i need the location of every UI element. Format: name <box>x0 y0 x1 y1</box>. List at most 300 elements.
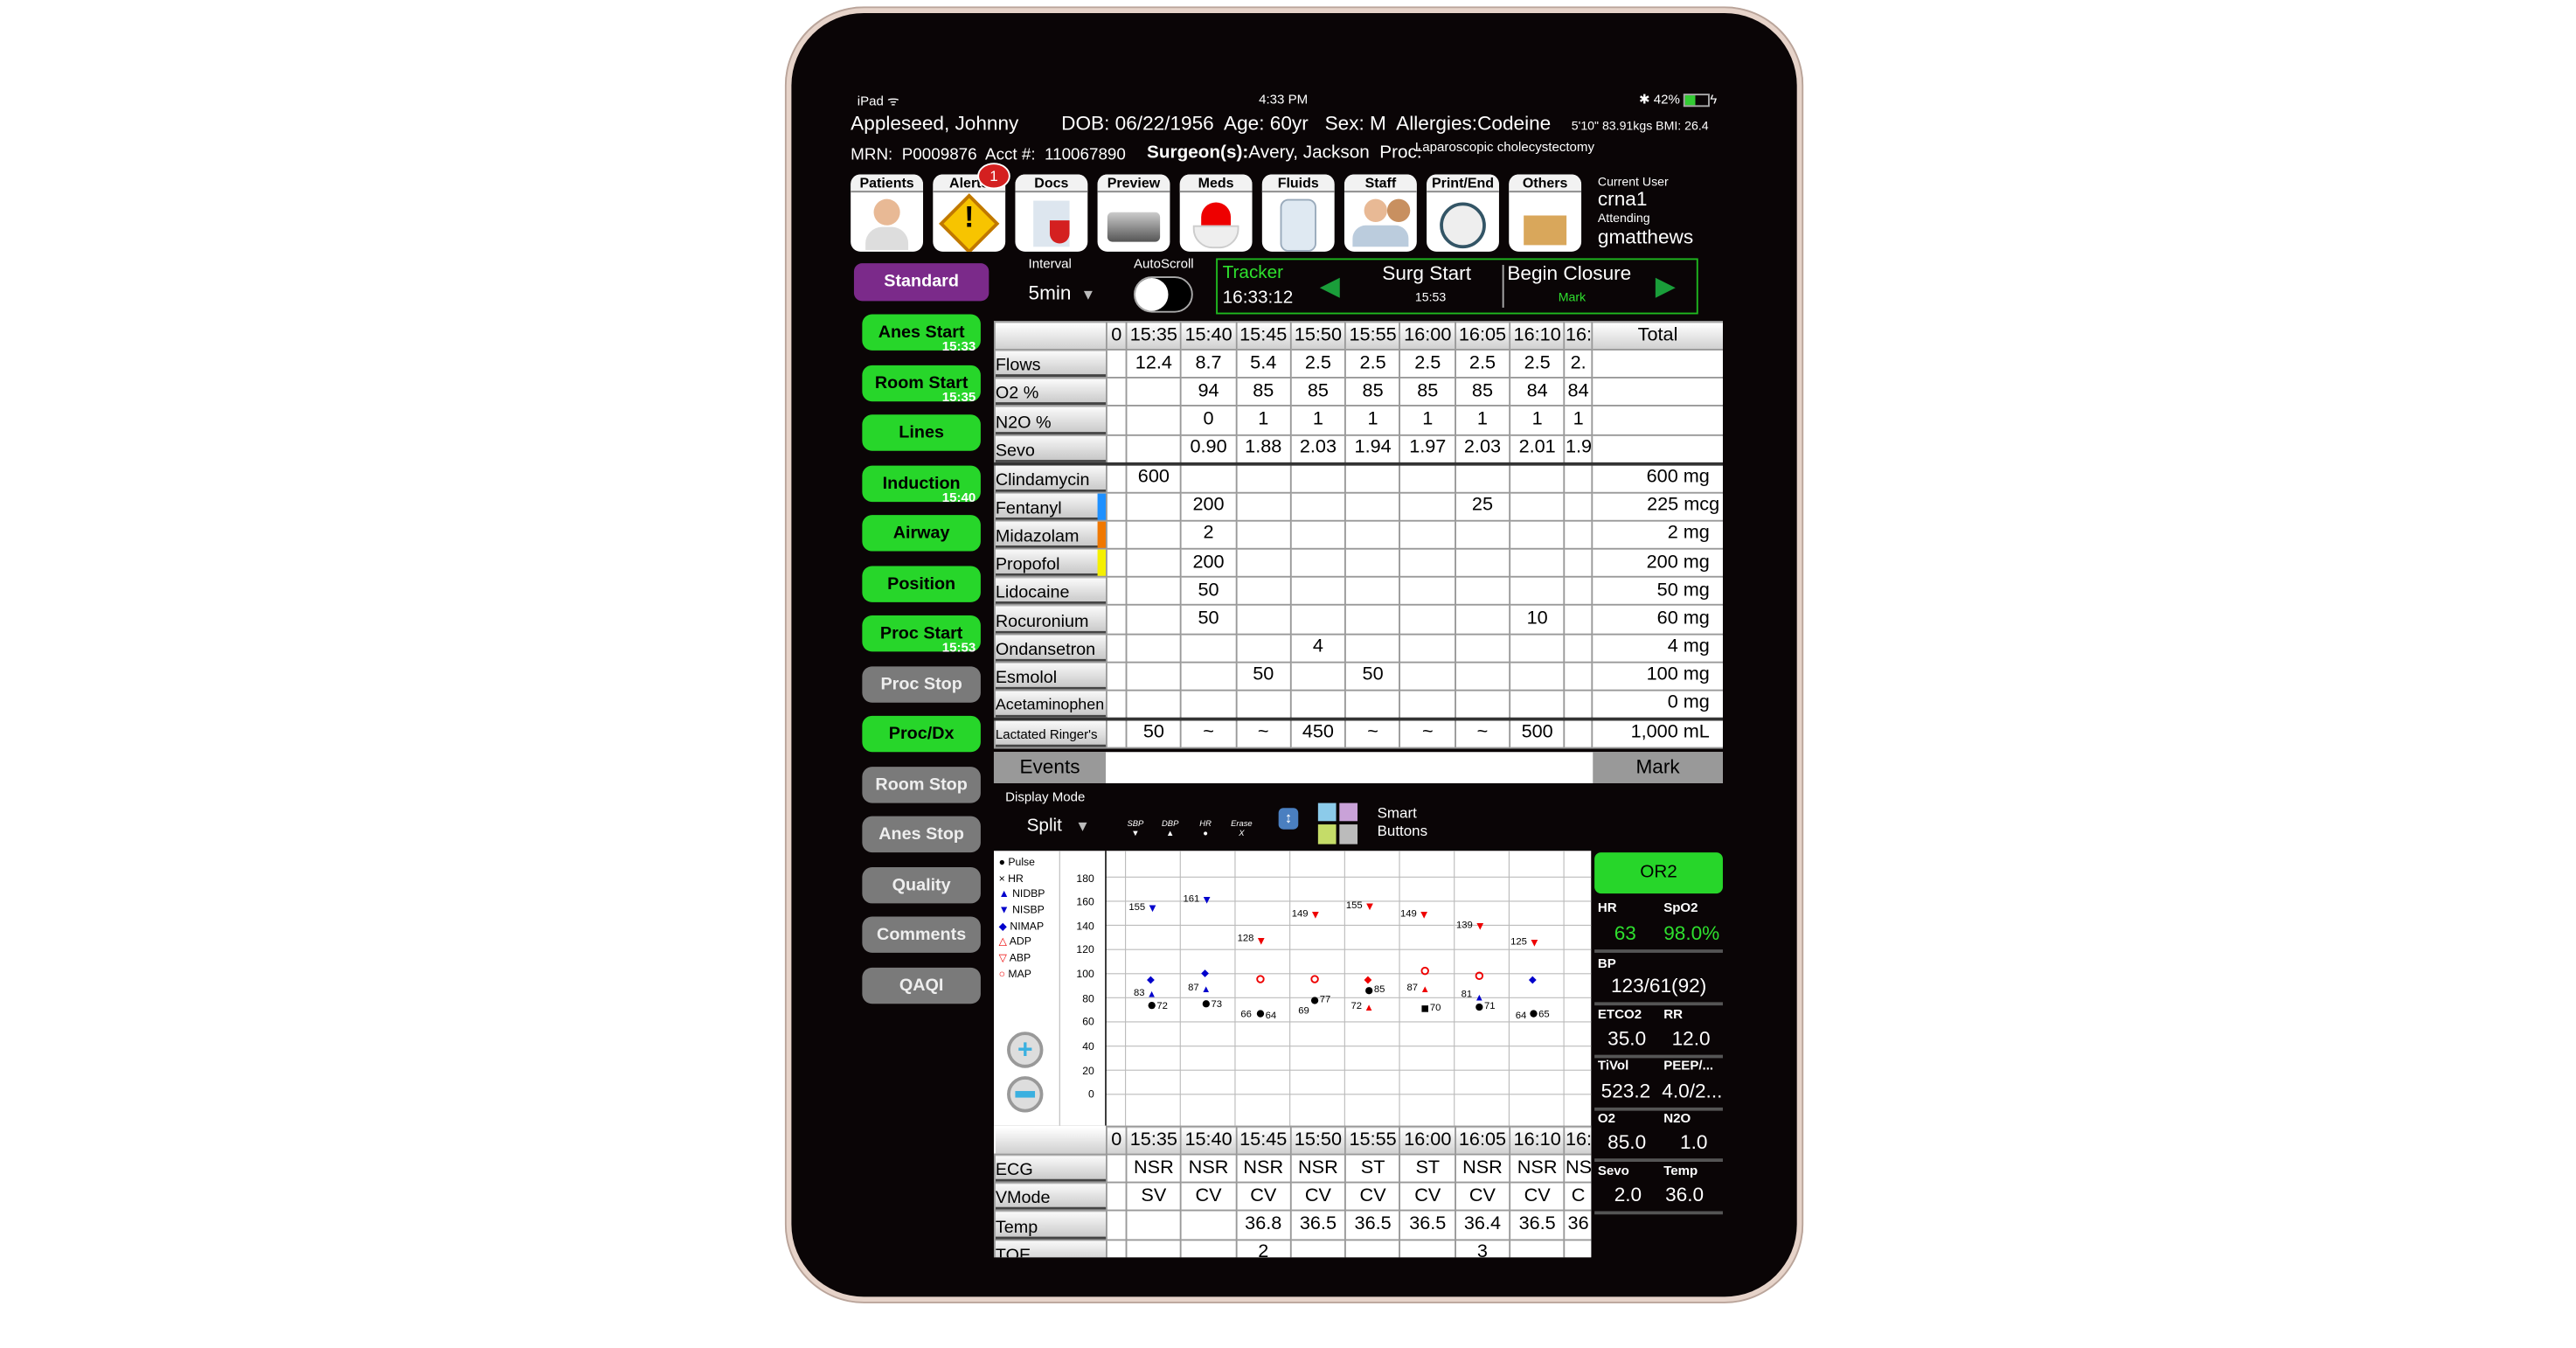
panel: live vitals: PEEP/... <box>1663 1058 1713 1073</box>
panel: live vitals: HR <box>1598 900 1617 915</box>
data points: ◆ <box>1147 975 1155 985</box>
table: flows and medications: 25 <box>1472 496 1493 515</box>
table: ecg, vent, temp: 15:45 <box>1239 1129 1287 1150</box>
icon: patients <box>851 174 923 252</box>
table: ecg, vent, temp: 16:00 <box>1404 1129 1451 1150</box>
data points: 70 <box>1430 1003 1441 1013</box>
table: flows and medications: 8.7 <box>1195 353 1222 372</box>
table: flows and medications: 2.01 <box>1519 438 1556 457</box>
current user: gmatthews <box>1598 226 1693 248</box>
icon: meds <box>1180 174 1253 252</box>
table: flows and medications: ~ <box>1367 723 1378 743</box>
table: flows and medications: 85 <box>1417 381 1438 401</box>
display mode controls: HR <box>1199 819 1212 830</box>
y axis labels: 100 <box>1076 968 1094 980</box>
table: ecg, vent, temp: VMode <box>996 1189 1051 1208</box>
table: ecg, vent, temp: NSR <box>1189 1157 1228 1178</box>
panel: live vitals: 98.0% <box>1663 921 1719 944</box>
panel: live vitals: 36.0 <box>1665 1183 1704 1206</box>
table: flows and medications: 1 <box>1422 410 1433 429</box>
display mode controls: X <box>1239 830 1245 839</box>
table: ecg, vent, temp: NSR <box>1243 1157 1283 1178</box>
table: flows and medications: 4 <box>1313 637 1323 657</box>
y axis labels <box>1076 872 1094 1101</box>
interval selector: Interval <box>1029 257 1072 272</box>
icon: meds: Meds <box>1198 174 1234 191</box>
table: flows and medications: 1 <box>1532 410 1543 429</box>
table: flows and medications: Lidocaine <box>996 583 1069 603</box>
event buttons column: 15:40 <box>942 490 976 504</box>
display mode controls: Smart <box>1378 804 1417 821</box>
data points: 155 <box>1128 902 1145 913</box>
data points: ▼ <box>1419 907 1430 921</box>
icon: staff <box>1344 174 1417 252</box>
event buttons column: Comments <box>877 925 966 944</box>
data points: 87 <box>1407 983 1418 993</box>
table: ecg, vent, temp: 36.8 <box>1245 1214 1281 1234</box>
table: flows and medications: Midazolam <box>996 526 1079 546</box>
table: flows and medications: 85 <box>1363 381 1384 401</box>
status bar: 4:33 PM <box>1259 92 1308 107</box>
table: flows and medications: 500 <box>1522 723 1553 743</box>
icon: fluids: Fluids <box>1278 174 1319 191</box>
chart legend: △ ADP <box>999 935 1031 947</box>
table: flows and medications: 15:50 <box>1295 325 1342 344</box>
table: flows and medications: 50 mg <box>1657 580 1710 601</box>
table: flows and medications: 600 <box>1138 468 1170 487</box>
table: flows and medications: 50 <box>1198 608 1219 629</box>
room badge: OR2 <box>1640 862 1677 882</box>
table: ecg, vent, temp: NSR <box>1298 1157 1338 1178</box>
display mode controls: DBP <box>1162 819 1178 830</box>
table: flows and medications: 1,000 mL <box>1631 723 1710 743</box>
panel: live vitals: ETCO2 <box>1598 1007 1642 1022</box>
display mode controls: Display Mode <box>1005 790 1085 804</box>
data points: ▼ <box>1147 901 1158 914</box>
device: ipad frame <box>785 6 1803 1303</box>
table: ecg, vent, temp: 15:40 <box>1184 1129 1232 1150</box>
table: flows and medications: N2O % <box>996 413 1052 432</box>
icon: preview <box>1098 174 1170 252</box>
table: flows and medications: 4 mg <box>1668 637 1710 657</box>
event buttons column: Airway <box>893 524 950 543</box>
data points: 139 <box>1456 921 1473 931</box>
data points: 66 <box>1240 1009 1252 1019</box>
table: flows and medications: 600 mg <box>1647 468 1710 487</box>
tracker panel: 15:53 <box>1415 289 1446 304</box>
table: flows and medications: 85 <box>1253 381 1274 401</box>
data points: ◆ <box>1364 975 1372 985</box>
table: flows and medications: Total <box>1638 325 1677 344</box>
events bar: Events <box>1019 755 1080 778</box>
display mode controls: Erase <box>1231 819 1253 830</box>
table: ecg, vent, temp: 15:55 <box>1349 1129 1397 1150</box>
table: flows and medications: O2 % <box>996 384 1038 404</box>
icon: staff: Staff <box>1365 174 1396 191</box>
display mode controls: ↕ <box>1285 809 1292 826</box>
icon: docs <box>1015 174 1087 252</box>
data points: ▲ <box>1147 990 1156 1000</box>
table: flows and medications: Clindamycin <box>996 469 1090 490</box>
panel: live vitals: N2O <box>1663 1111 1691 1126</box>
event buttons column: Proc Stop <box>880 674 962 693</box>
table: flows and medications: Esmolol <box>996 668 1057 688</box>
badge: alert count <box>977 163 1010 189</box>
interval selector <box>1029 257 1095 304</box>
data points: ◆ <box>1201 968 1209 978</box>
data points: ▼ <box>1364 900 1376 913</box>
table: flows and medications: 16: <box>1566 325 1592 344</box>
event buttons column: Anes Stop <box>878 824 964 844</box>
table: flows and medications: 84 <box>1568 381 1589 401</box>
panel: live vitals: O2 <box>1598 1111 1615 1126</box>
patient info row: 5'10" 83.91kgs BMI: 26.4 <box>1572 118 1709 133</box>
data points: ▼ <box>1529 935 1540 948</box>
table: ecg, vent, temp: 36.5 <box>1519 1214 1556 1234</box>
panel: live vitals: RR <box>1663 1007 1683 1022</box>
tracker panel: ◀ <box>1320 273 1340 301</box>
standard button <box>854 263 989 301</box>
table: ecg, vent, temp: NS <box>1566 1157 1591 1178</box>
display mode controls: SBP <box>1127 819 1143 830</box>
table: flows and medications: 16:10 <box>1514 325 1561 344</box>
data points: 85 <box>1374 984 1385 995</box>
mrn row: Laparoscopic cholecystectomy <box>1415 140 1594 155</box>
table: flows and medications: 1.9 <box>1566 438 1592 457</box>
display mode controls: ▲ <box>1166 830 1174 839</box>
table: flows and medications: 15:55 <box>1349 325 1397 344</box>
table: flows and medications: 50 <box>1143 723 1164 743</box>
event buttons column: Lines <box>899 423 944 442</box>
table: ecg, vent, temp: 36.5 <box>1409 1214 1446 1234</box>
events bar <box>994 752 1723 783</box>
tracker panel: Surg Start <box>1382 261 1471 285</box>
status bar <box>858 92 1717 108</box>
table: flows and medications: 16:05 <box>1459 325 1506 344</box>
table: flows and medications: 1 <box>1368 410 1378 429</box>
table: flows and medications: 2.5 <box>1305 353 1331 372</box>
y axis labels: 80 <box>1082 992 1094 1004</box>
table: ecg, vent, temp: 16: <box>1566 1129 1591 1150</box>
tracker panel: Mark <box>1559 289 1586 304</box>
table: flows and medications: ~ <box>1422 723 1434 743</box>
table: ecg, vent, temp <box>994 1126 1591 1257</box>
autoscroll toggle: AutoScroll <box>1134 257 1194 272</box>
icon: fluids <box>1262 174 1335 252</box>
mrn row: MRN: P0009876 Acct #: 110067890 <box>851 146 1126 164</box>
autoscroll toggle <box>1134 257 1194 313</box>
table: flows and medications: ~ <box>1203 723 1214 743</box>
event buttons column: Room Stop <box>875 775 968 794</box>
data points: 64 <box>1266 1011 1276 1021</box>
panel: live vitals: SpO2 <box>1663 900 1698 915</box>
y axis labels: 0 <box>1088 1088 1094 1101</box>
status bar: ✱ 42% ϟ <box>1639 92 1717 107</box>
table: ecg, vent, temp: NSR <box>1134 1157 1174 1178</box>
panel: live vitals: Sevo <box>1598 1164 1629 1178</box>
y axis labels: 120 <box>1076 943 1094 955</box>
panel: live vitals: 63 <box>1614 921 1636 944</box>
interval selector: 5min ▼ <box>1029 281 1095 304</box>
table: flows and medications: Sevo <box>996 441 1035 460</box>
icon: others <box>1509 174 1581 252</box>
table: flows and medications: Flows <box>996 356 1040 375</box>
data points: ▼ <box>1475 920 1486 933</box>
tracker panel <box>1216 258 1698 314</box>
table: flows and medications: 2.03 <box>1300 438 1337 457</box>
table: flows and medications: 200 <box>1192 552 1225 572</box>
icon: alerts: Alerts <box>949 174 989 191</box>
table: ecg, vent, temp: 36.5 <box>1355 1214 1392 1234</box>
table: ecg, vent, temp: C <box>1572 1186 1585 1206</box>
panel: live vitals: 2.0 <box>1614 1183 1642 1206</box>
data points: 128 <box>1238 934 1253 944</box>
table: flows and medications: ~ <box>1477 723 1488 743</box>
y axis labels: 20 <box>1082 1065 1094 1077</box>
chart legend: ▼ NISBP <box>999 904 1045 916</box>
table: flows and medications: Acetaminophen <box>996 696 1104 714</box>
event buttons column: Proc/Dx <box>889 724 954 744</box>
table: ecg, vent, temp: ST <box>1361 1157 1385 1178</box>
table: flows and medications: 16:00 <box>1404 325 1451 344</box>
table: flows and medications: 1.88 <box>1245 438 1281 457</box>
data points: 161 <box>1183 894 1199 905</box>
data points: ◆ <box>1529 975 1537 985</box>
table: flows and medications: 60 mg <box>1657 608 1710 629</box>
event buttons column: Quality <box>892 874 951 894</box>
table: flows and medications: 100 mg <box>1647 665 1710 685</box>
table: ecg, vent, temp: CV <box>1414 1186 1441 1206</box>
panel: live vitals <box>1594 852 1723 1215</box>
current user <box>1598 174 1693 248</box>
event buttons column: Anes Start <box>878 323 965 342</box>
table: flows and medications: 450 <box>1302 723 1334 743</box>
status bar: iPad ᯤ <box>858 94 899 108</box>
table: flows and medications: Ondansetron <box>996 640 1095 659</box>
table: flows and medications: 1 <box>1573 410 1584 429</box>
vitals chart <box>994 851 1591 1126</box>
panel: live vitals: 85.0 <box>1607 1130 1646 1154</box>
panel: live vitals: Temp <box>1663 1164 1698 1178</box>
current user: Attending <box>1598 211 1650 226</box>
table: ecg, vent, temp: ECG <box>996 1160 1033 1180</box>
data points: 149 <box>1400 908 1417 919</box>
event buttons column: Proc Start <box>880 623 962 643</box>
table: flows and medications: 85 <box>1472 381 1493 401</box>
data points <box>1128 893 1550 1021</box>
table: ecg, vent, temp: 36.4 <box>1464 1214 1501 1234</box>
icon: print/end: Print/End <box>1432 174 1494 191</box>
event buttons column: Induction <box>883 473 961 493</box>
table: flows and medications: 1 <box>1258 410 1268 429</box>
mrn row: Surgeon(s):Avery, Jackson Proc: <box>1147 143 1422 163</box>
data points: 73 <box>1211 999 1222 1010</box>
table: flows and medications: 2.5 <box>1524 353 1551 372</box>
event buttons column: 15:53 <box>942 640 976 655</box>
data points: 77 <box>1320 994 1330 1004</box>
table: flows and medications: 2.03 <box>1464 438 1501 457</box>
panel: live vitals: 1.0 <box>1680 1130 1707 1154</box>
table: flows and medications: 0 mg <box>1668 693 1710 713</box>
display mode controls <box>1005 790 1427 844</box>
panel: live vitals: 12.0 <box>1672 1027 1711 1050</box>
y axis labels: 180 <box>1076 872 1094 885</box>
table: flows and medications <box>994 321 1723 748</box>
chart legend: ▲ NIDBP <box>999 887 1045 900</box>
data points: ▲ <box>1364 1003 1374 1013</box>
icon: alerts <box>933 174 1005 252</box>
room badge <box>1594 852 1723 893</box>
tracker panel: 16:33:12 <box>1223 288 1293 308</box>
table: ecg, vent, temp: NSR <box>1517 1157 1557 1178</box>
table: flows and medications: 225 mcg <box>1647 496 1719 515</box>
panel: live vitals: TiVol <box>1598 1058 1628 1073</box>
icon: preview: Preview <box>1107 174 1160 191</box>
event buttons column <box>862 315 981 1004</box>
table: flows and medications: 2 <box>1204 524 1214 544</box>
chart legend: ▽ ABP <box>999 951 1031 963</box>
table: ecg, vent, temp: 36 <box>1568 1214 1589 1234</box>
data points: ▼ <box>1201 893 1212 906</box>
data points: ▼ <box>1309 907 1321 921</box>
data points: 64 <box>1516 1011 1526 1021</box>
patient info row <box>851 112 1709 135</box>
table: flows and medications: 2.5 <box>1469 353 1496 372</box>
table: flows and medications: 0.90 <box>1190 438 1227 457</box>
table: flows and medications: 2.5 <box>1360 353 1386 372</box>
table: ecg, vent, temp: CV <box>1360 1186 1386 1206</box>
current user: Current User <box>1598 174 1669 189</box>
table: ecg, vent, temp: SV <box>1141 1186 1166 1206</box>
y axis labels: 60 <box>1082 1016 1094 1028</box>
table: ecg, vent, temp: NSR <box>1462 1157 1503 1178</box>
display mode controls: ● <box>1203 830 1208 839</box>
table: ecg, vent, temp: CV <box>1524 1186 1551 1206</box>
data points: 72 <box>1156 1001 1168 1011</box>
table: flows and medications: 2.5 <box>1414 353 1441 372</box>
table: flows and medications: 94 <box>1198 381 1219 401</box>
event buttons column: 15:35 <box>942 389 976 404</box>
icon: alerts: ! <box>964 201 974 233</box>
table: flows and medications: Lactated Ringer's <box>996 727 1098 742</box>
current user: crna1 <box>1598 187 1647 211</box>
data points: ▲ <box>1475 993 1484 1004</box>
patient info row: DOB: 06/22/1956 Age: 60yr Sex: M Allergies:Codeine <box>1061 112 1551 135</box>
table: flows and medications: Rocuronium <box>996 611 1088 631</box>
table: flows and medications: 84 <box>1527 381 1548 401</box>
table: flows and medications: 1 <box>1477 410 1488 429</box>
table: flows and medications: 50 <box>1253 665 1274 685</box>
display mode controls: Split ▼ <box>1027 816 1090 836</box>
table: flows and medications: Fentanyl <box>996 498 1062 518</box>
icon: print/end <box>1427 174 1499 252</box>
events bar: Mark <box>1635 755 1680 778</box>
chart legend: × HR <box>999 872 1024 885</box>
table: flows and medications: 2 mg <box>1668 524 1710 544</box>
table: ecg, vent, temp: CV <box>1196 1186 1222 1206</box>
table: flows and medications: 15:45 <box>1239 325 1287 344</box>
table: ecg, vent, temp: Temp <box>996 1217 1038 1237</box>
table: flows and medications: 5.4 <box>1250 353 1276 372</box>
table: ecg, vent, temp: 0 <box>1111 1129 1121 1150</box>
display mode controls: ▼ <box>1131 830 1140 839</box>
icon: docs: Docs <box>1034 174 1068 191</box>
data points: 87 <box>1188 983 1199 993</box>
table: ecg, vent, temp: 16:05 <box>1459 1129 1506 1150</box>
display mode controls: Buttons <box>1378 823 1427 839</box>
panel: live vitals: 123/61(92) <box>1611 974 1706 997</box>
y axis labels: 160 <box>1076 895 1094 907</box>
chart legend: ○ MAP <box>999 968 1031 980</box>
data points: 65 <box>1538 1009 1550 1019</box>
data points: 83 <box>1134 988 1145 998</box>
event buttons column: Position <box>887 573 955 594</box>
standard button: Standard <box>884 272 959 291</box>
table: flows and medications: 1 <box>1313 410 1323 429</box>
table: flows and medications: 1.94 <box>1355 438 1392 457</box>
y axis labels: 40 <box>1082 1040 1094 1053</box>
tracker panel: Begin Closure <box>1507 261 1631 285</box>
chart legend: ● Pulse <box>999 856 1035 868</box>
table: ecg, vent, temp: ST <box>1415 1157 1440 1178</box>
zoom buttons: + <box>1017 1035 1033 1064</box>
table: flows and medications: 15:40 <box>1184 325 1232 344</box>
table: flows and medications: ~ <box>1258 723 1269 743</box>
table: flows and medications: Propofol <box>996 555 1059 574</box>
panel: live vitals: BP <box>1598 956 1616 971</box>
patient info row: Appleseed, Johnny <box>851 112 1018 135</box>
table: flows and medications: 10 <box>1527 608 1548 629</box>
event buttons column: 15:33 <box>942 339 976 354</box>
table: flows and medications: 0 <box>1204 410 1214 429</box>
data points: 81 <box>1462 990 1472 1000</box>
table: flows and medications: 85 <box>1308 381 1329 401</box>
table: ecg, vent, temp: 36.5 <box>1300 1214 1337 1234</box>
table: ecg, vent, temp: 15:50 <box>1295 1129 1342 1150</box>
toolbar icons <box>851 174 1582 252</box>
panel: live vitals: 523.2 <box>1601 1080 1650 1102</box>
table: flows and medications: 0 <box>1111 325 1121 344</box>
table: ecg, vent, temp: CV <box>1305 1186 1331 1206</box>
mrn row <box>851 140 1594 164</box>
table: flows and medications: 12.4 <box>1135 353 1172 372</box>
table: flows and medications: 50 <box>1363 665 1384 685</box>
data points: ▼ <box>1255 934 1267 947</box>
data points: ▲ <box>1420 984 1430 995</box>
data points: 71 <box>1484 1001 1496 1011</box>
y axis labels: 140 <box>1076 921 1094 933</box>
badge: alert count: 1 <box>989 168 998 184</box>
table: flows and medications: 1.97 <box>1409 438 1446 457</box>
panel: live vitals: 4.0/2... <box>1662 1080 1722 1102</box>
table: ecg, vent, temp: 15:35 <box>1130 1129 1177 1150</box>
event buttons column: Room Start <box>875 372 968 393</box>
data points: 149 <box>1292 908 1309 919</box>
icon: patients: Patients <box>859 174 914 191</box>
panel: live vitals: 35.0 <box>1607 1027 1646 1050</box>
table: flows and medications: 15:35 <box>1130 325 1177 344</box>
data points: 125 <box>1510 936 1527 947</box>
data points: 69 <box>1298 1006 1309 1017</box>
data points: 155 <box>1346 900 1363 911</box>
table: flows and medications: 200 <box>1192 496 1225 515</box>
table: ecg, vent, temp: CV <box>1469 1186 1496 1206</box>
data points: ▲ <box>1201 984 1211 995</box>
table: ecg, vent, temp: CV <box>1250 1186 1276 1206</box>
zoom buttons <box>1009 1033 1042 1111</box>
chart legend: ◆ NIMAP <box>999 921 1044 933</box>
event buttons column: QAQI <box>899 975 943 995</box>
